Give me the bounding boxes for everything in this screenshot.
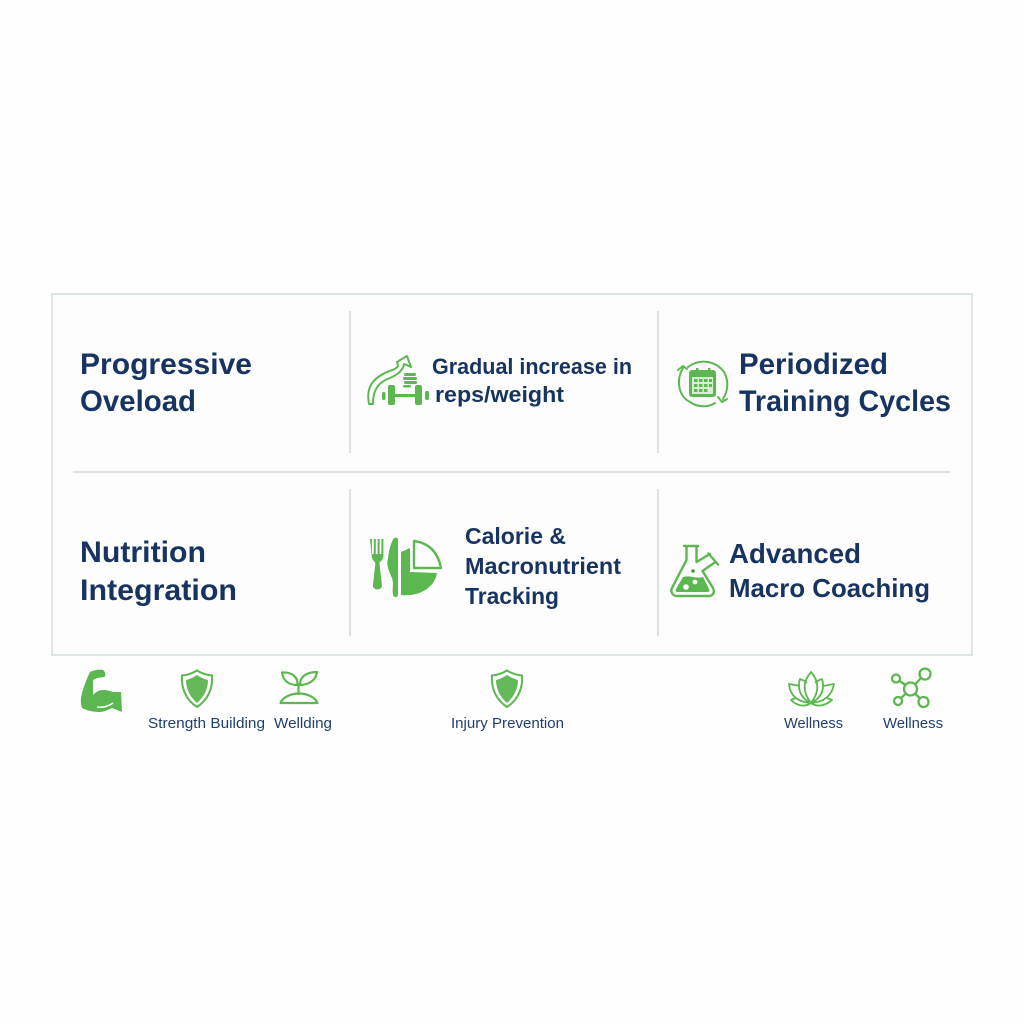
heading: Advanced Macro Coaching: Macro Coaching [729, 573, 930, 603]
icon: fork knife and pie chart [370, 538, 441, 597]
icon: dumbbell with rising arrow [368, 356, 429, 405]
text: Calorie & Macronutrient Tracking: Macronutrient [465, 553, 621, 579]
icon: sprout [280, 672, 318, 703]
label: Strength Building: Strength Building [148, 716, 265, 732]
icon: flask [671, 546, 718, 596]
icon: molecule network [892, 668, 930, 707]
text: Gradual increase in reps/weight: Gradual increase in [432, 354, 632, 379]
heading: Progressive Oveload [80, 348, 252, 418]
text: Calorie & Macronutrient Tracking [465, 523, 621, 609]
heading: Advanced Macro Coaching [729, 538, 930, 603]
text: Gradual increase in reps/weight: reps/weight [435, 382, 565, 407]
label: Wellness right: Wellness [883, 716, 943, 732]
heading: Nutrition Integration: Integration [80, 574, 237, 607]
icon: calendar with cycle arrows [678, 362, 727, 406]
icon: flexed arm [81, 670, 122, 712]
heading: Periodized Training Cycles [739, 348, 951, 418]
icon: shield center [492, 670, 522, 707]
heading: Periodized Training Cycles: Periodized [739, 348, 888, 381]
icon: lotus [789, 672, 834, 706]
heading: Nutrition Integration: Nutrition [80, 536, 206, 569]
label: Wellness left: Wellness [784, 716, 843, 732]
label: Injury Prevention: Injury Prevention [451, 716, 564, 732]
heading: Nutrition Integration [80, 536, 237, 607]
text: Calorie & Macronutrient Tracking: Calorie & [465, 523, 566, 549]
heading: Advanced Macro Coaching: Advanced [729, 538, 861, 569]
heading: Periodized Training Cycles: Training Cycles [739, 385, 951, 418]
heading: Progressive Oveload: Oveload [80, 385, 196, 418]
icon: shield left [182, 670, 212, 707]
panel: main grid [52, 294, 972, 655]
text: Calorie & Macronutrient Tracking: Tracking [465, 583, 559, 609]
text: Gradual increase in reps/weight [432, 354, 632, 407]
label: Wellding: Wellding [274, 716, 332, 732]
heading: Progressive Oveload: Progressive [80, 348, 252, 381]
